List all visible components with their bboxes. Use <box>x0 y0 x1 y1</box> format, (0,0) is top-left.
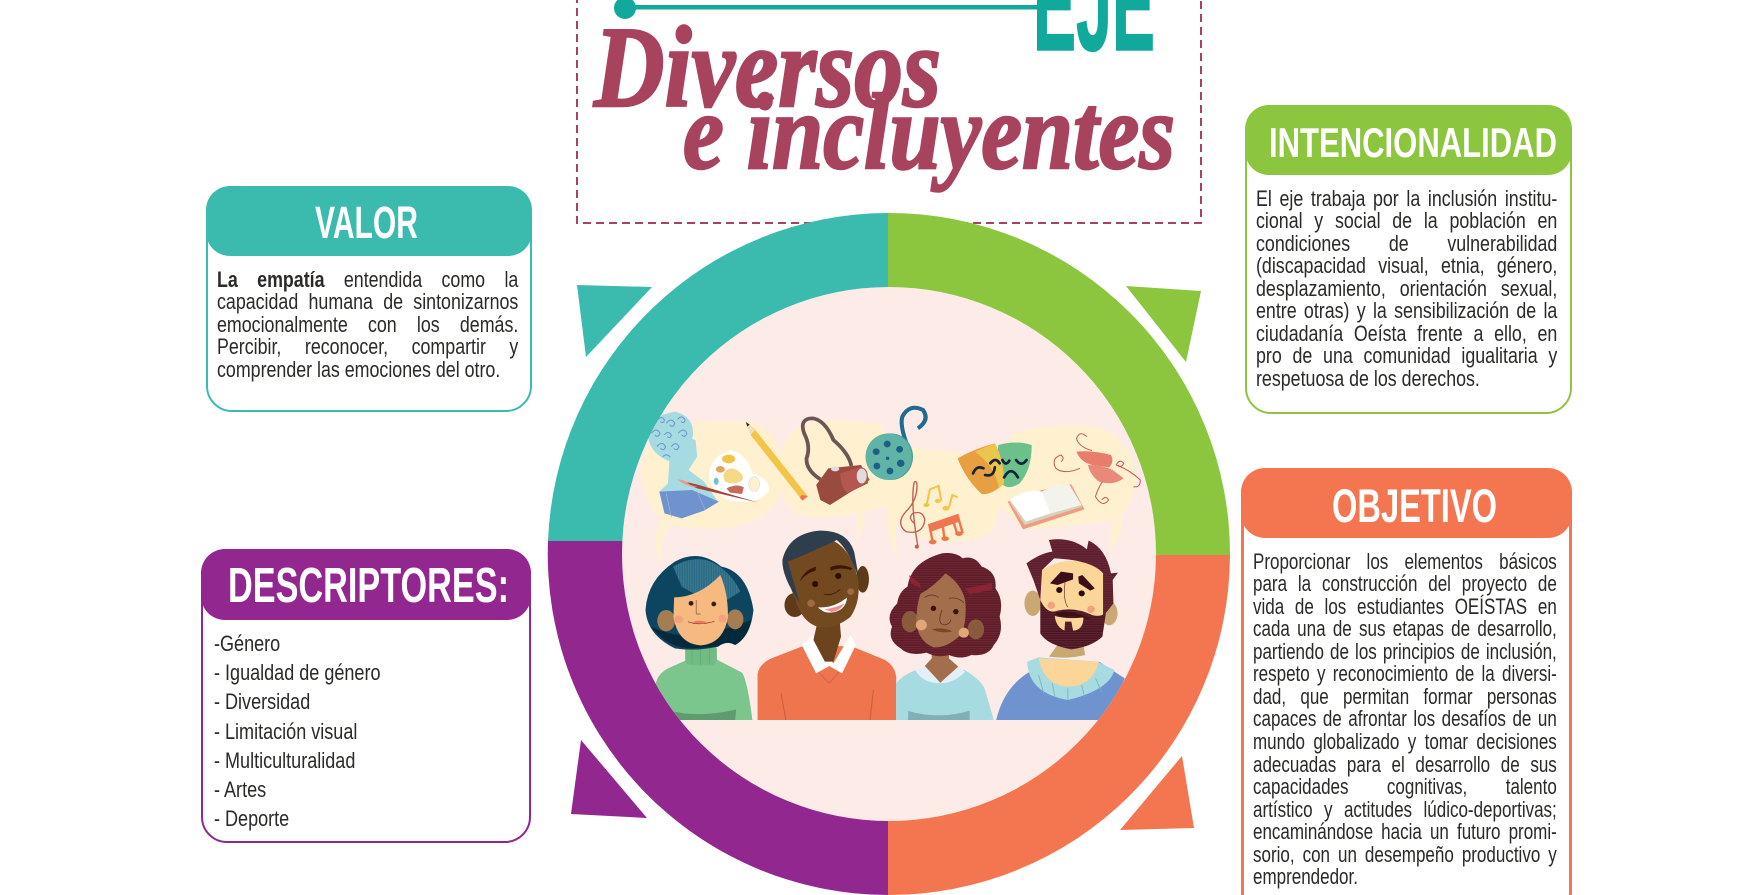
text block: objetivo <box>1253 548 1557 889</box>
timeline line and dot <box>614 0 1037 19</box>
group of four people <box>646 531 1125 720</box>
text block: valor: comprender las emociones del otro. <box>217 356 500 382</box>
title: Diversos e incluyentes: e incluyentes <box>683 73 1175 192</box>
text block: intencionalidad: entre otras) y la sensibilización de la <box>1256 298 1557 323</box>
text block: objetivo: adecuadas para el desarrollo de sus <box>1253 752 1557 777</box>
text block: objetivo: encaminándose hacia un futuro promi- <box>1253 819 1557 844</box>
panel: descriptores <box>201 549 531 843</box>
text block: objetivo: Proporcionar los elementos básicos <box>1253 548 1557 574</box>
text block: valor <box>217 266 518 382</box>
icon: pencil <box>746 422 808 501</box>
list: descriptores: - Diversidad <box>214 689 310 714</box>
thought bubbles <box>640 420 1137 567</box>
list: descriptores: - Multiculturalidad <box>214 748 355 773</box>
heading: OBJETIVO <box>1241 468 1572 538</box>
text block: intencionalidad: El eje trabaja por la inclusión institu- <box>1256 186 1557 210</box>
person: woman with green sweater <box>646 556 753 720</box>
heading: OBJETIVO: OBJETIVO <box>1332 479 1497 532</box>
panel: objetivo <box>1241 468 1572 895</box>
panel: intencionalidad <box>1245 105 1572 414</box>
list: descriptores: - Limitación visual <box>214 719 357 744</box>
icon: theatre masks <box>958 442 1032 494</box>
wheel ring <box>548 213 1230 895</box>
text block: intencionalidad: desplazamiento, orientación sexual, <box>1256 276 1557 300</box>
person: bearded man with blue sweater <box>996 539 1125 720</box>
text block: valor: Percibir, reconocer, compartir y <box>217 334 518 359</box>
header and central wheel graphic <box>548 0 1230 895</box>
thought bubbles and art icons <box>640 408 1140 567</box>
icon: film reel <box>865 408 926 480</box>
icon: palette and brush <box>677 450 769 503</box>
person: man with orange sweater <box>758 531 896 720</box>
list: descriptores: - Igualdad de género <box>214 660 381 685</box>
wheel inner disc <box>622 287 1156 821</box>
title frame dashed <box>577 0 1201 223</box>
text block: objetivo: artístico y actitudes lúdico-deportivas; <box>1253 797 1557 822</box>
heading: DESCRIPTORES <box>201 549 531 620</box>
text block: intencionalidad: cional y social de la población en <box>1256 208 1557 233</box>
text block: valor: emocionalmente con los demás. <box>217 312 518 336</box>
text block: objetivo: para la construcción del proyecto de <box>1253 571 1557 596</box>
text block: intencionalidad: pro de una comunidad igualitaria y <box>1256 343 1557 368</box>
text block: objetivo: vida de los estudiantes OEÍSTAS en <box>1253 594 1557 619</box>
text block: objetivo: mundo globalizado y tomar decisiones <box>1253 729 1557 754</box>
heading: INTENCIONALIDAD <box>1245 105 1572 175</box>
text block: valor: capacidad humana de sintonizarnos <box>217 289 518 314</box>
text block: objetivo: dad, que permitan formar personas <box>1253 684 1557 709</box>
arrow: purple <box>571 740 647 818</box>
list: descriptores: -Género <box>214 631 280 656</box>
text block: objetivo: emprendedor. <box>1253 864 1358 889</box>
text block: objetivo: cada una de sus etapas de desarrollo, <box>1253 616 1557 641</box>
heading: VALOR <box>206 186 532 256</box>
list: descriptores: - Artes <box>214 777 266 802</box>
text block: intencionalidad: ciudadanía Oeísta frente a ello, en <box>1256 320 1557 346</box>
text block: objetivo: respeto y reconocimiento de la diversi- <box>1253 661 1557 686</box>
title: Diversos e incluyentes <box>593 4 1175 192</box>
text block: objetivo: partiendo de los principios de inclusión, <box>1253 639 1557 664</box>
panel: valor <box>206 186 532 412</box>
icon: camera <box>803 418 870 505</box>
central illustration <box>640 408 1140 720</box>
title: Diversos e incluyentes: Diversos <box>593 4 941 132</box>
list: descriptores <box>214 631 381 831</box>
text block: objetivo: capaces de afrontar los desafíos de un <box>1253 706 1557 731</box>
text block: intencionalidad: (discapacidad visual, etnia, género, <box>1256 253 1557 278</box>
list: descriptores: - Deporte <box>214 806 289 831</box>
text block: objetivo: capacidades cognitivas, talento <box>1253 774 1557 799</box>
arrow: green <box>1126 286 1201 362</box>
text block: intencionalidad: respetuosa de los derechos. <box>1256 366 1480 390</box>
arrow: teal <box>577 285 652 357</box>
text block: intencionalidad: condiciones de vulnerabilidad <box>1256 230 1557 256</box>
icon: open book <box>1008 484 1084 529</box>
heading: VALOR: VALOR <box>315 197 418 248</box>
text block: intencionalidad <box>1256 186 1558 390</box>
person: woman with light blue sweater <box>890 553 1001 720</box>
icon: bust sculpture <box>648 412 719 518</box>
text block: objetivo: sorio, con un desempeño productivo y <box>1253 842 1557 867</box>
arrow: orange <box>1120 756 1194 830</box>
icon: ballet shoes <box>1054 434 1140 503</box>
icon: music notes <box>901 481 963 549</box>
text block: valor: La empatía entendida como la <box>217 266 518 292</box>
